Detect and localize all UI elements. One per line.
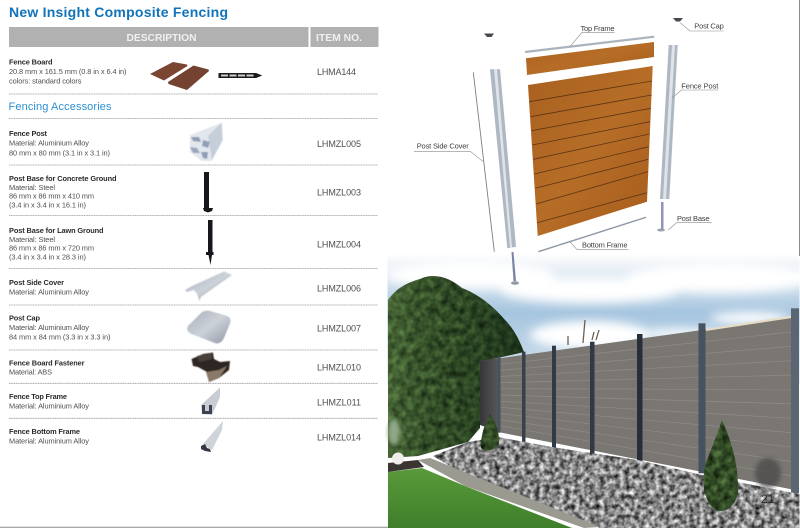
exploded fence diagram — [414, 18, 724, 285]
row: fence board fastener: Fence Board Fastener — [9, 358, 85, 367]
row: post cap: Post Cap — [9, 314, 40, 323]
hedge — [388, 276, 524, 458]
row: fence board fastener — [9, 352, 361, 382]
label: post base — [668, 214, 712, 230]
garden lamp — [392, 452, 404, 464]
row: post side cover: LHMZL006 — [317, 283, 361, 293]
right shrub — [703, 420, 738, 511]
icon: fence bottom frame — [201, 421, 223, 452]
icon: fence post profile — [190, 123, 223, 161]
label: top frame: Top Frame — [580, 24, 614, 33]
bare branches — [568, 320, 599, 345]
row: fence board fastener: Material: ABS — [9, 368, 52, 377]
row: fence post — [9, 123, 361, 161]
page number: 21 — [761, 492, 775, 506]
row: post cap: 84 mm x 84 mm (3.3 in x 3.3 in) — [9, 333, 110, 342]
label: post cap: Post Cap — [694, 22, 724, 30]
row: post cap — [9, 311, 361, 344]
row: post side cover: Post Side Cover — [9, 278, 64, 287]
row: post cap: Material: Aluminium Alloy — [9, 323, 89, 332]
icon: fence boards — [150, 62, 262, 90]
icon: lawn post base — [206, 220, 214, 265]
row: post base for lawn ground: 86 mm x 86 mm x 720 mm — [9, 244, 94, 253]
fence posts — [498, 308, 799, 493]
row: post base for concrete ground: (3.4 in x 3.4 in x 16.1 in) — [9, 200, 86, 209]
row: fence top frame — [9, 388, 361, 415]
left post base — [511, 252, 519, 285]
label: post side cover: Post Side Cover — [417, 142, 469, 151]
row: fence post: 80 mm x 80 mm (3.1 in x 3.1 in) — [9, 148, 110, 157]
bottom frame — [538, 217, 646, 252]
row: fence top frame: LHMZL011 — [317, 397, 361, 407]
row: fence post: Material: Aluminium Alloy — [9, 139, 89, 148]
photo: installed fence — [385, 254, 800, 528]
row: post base for lawn ground: LHMZL004 — [317, 240, 361, 250]
row: post base for lawn ground: Post Base for Lawn Ground — [9, 226, 104, 235]
label: top frame — [570, 24, 614, 47]
right fence post — [660, 45, 678, 199]
row: fence board — [9, 58, 356, 90]
icon: post side cover — [185, 272, 232, 301]
row: fence board: colors: standard colors — [9, 76, 82, 86]
row: fence post: LHMZL005 — [317, 139, 361, 149]
top wood board — [526, 42, 654, 75]
row: fence top frame: Material: Aluminium Alloy — [9, 402, 89, 411]
table header: ITEM NO. — [316, 32, 362, 44]
icon: fence top frame — [201, 388, 220, 415]
row: fence bottom frame: LHMZL014 — [317, 432, 361, 442]
row: fence top frame: Fence Top Frame — [9, 392, 67, 401]
row: fence bottom frame: Material: Aluminium Alloy — [9, 437, 89, 446]
row: fence board fastener: LHMZL010 — [317, 363, 361, 373]
icon: post cap — [187, 311, 231, 344]
label: post base: Post Base — [677, 214, 710, 223]
table header — [9, 27, 378, 47]
row: post side cover: Material: Aluminium Alloy — [9, 288, 89, 297]
row: post base for concrete ground: Material: Steel — [9, 183, 55, 192]
post cap right — [673, 18, 683, 22]
row: fence bottom frame — [9, 421, 361, 452]
row: post base for lawn ground: Material: Steel — [9, 235, 55, 244]
curb stones — [418, 458, 600, 528]
row: post side cover — [9, 272, 361, 301]
table header: DESCRIPTION — [126, 32, 196, 44]
row: post base for concrete ground: LHMZL003 — [317, 188, 361, 198]
fence panels — [480, 316, 795, 490]
row: fence board: LHMA144 — [317, 67, 356, 77]
row: post base for lawn ground: (3.4 in x 3.4 in x 28.3 in) — [9, 253, 86, 262]
label: post cap — [680, 22, 724, 31]
right post base — [657, 202, 665, 232]
icon: concrete post base — [203, 172, 213, 212]
post side cover strip — [473, 72, 494, 252]
row: fence bottom frame: Fence Bottom Frame — [9, 427, 80, 436]
row: post cap: LHMZL007 — [317, 323, 361, 333]
top frame — [525, 37, 654, 52]
row: fence board: Fence Board — [9, 58, 53, 66]
icon: fence board fastener — [192, 352, 230, 382]
row: post base for concrete ground: 86 mm x 86 mm x 410 mm — [9, 192, 94, 201]
row: post base for concrete ground: Post Base for Concrete Ground — [9, 174, 117, 183]
label: fence post — [672, 82, 719, 98]
left shrub — [481, 414, 499, 450]
label: fence post: Fence Post — [681, 82, 719, 90]
row: fence post: Fence Post — [9, 129, 48, 138]
lawn — [388, 468, 572, 528]
label: post side cover — [414, 142, 483, 162]
title: New Insight Composite Fencing — [9, 4, 228, 20]
row: post base for lawn ground — [9, 220, 361, 265]
rock bed — [433, 437, 800, 528]
sky — [385, 254, 800, 384]
row: fence board: 20.8 mm x 161.5 mm (0.8 in x 6.4 in) — [9, 67, 126, 76]
main wood panel — [528, 66, 653, 236]
row: post base for concrete ground — [9, 172, 361, 212]
section heading: fencing accessories: Fencing Accessories — [8, 101, 112, 113]
post cap left — [484, 34, 494, 37]
label: bottom frame: Bottom Frame — [582, 241, 628, 250]
left fence post — [490, 69, 516, 248]
